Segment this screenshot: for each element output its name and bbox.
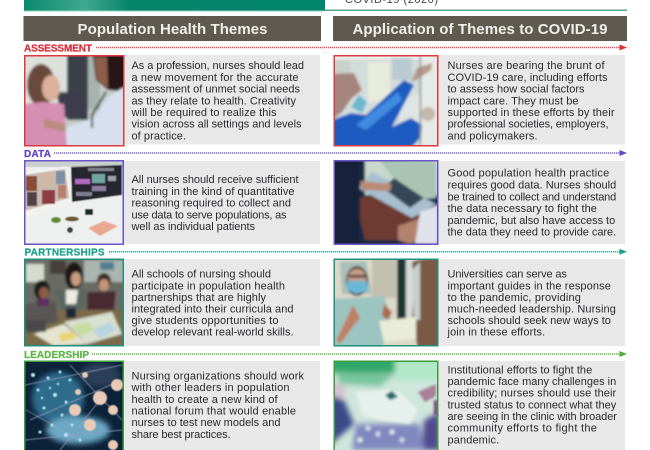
text: data applied: the data they need to provide care. — [448, 226, 616, 238]
panel: data theme — [20, 155, 320, 250]
text: partnerships theme: partnerships that are highly — [132, 292, 266, 304]
text: partnerships theme: develop relevant real-world skills. — [132, 326, 294, 338]
text: partnerships theme: give students opportunities to — [132, 315, 278, 327]
text: data applied — [448, 168, 616, 238]
text: assessment applied: impact care. They must be — [448, 96, 578, 108]
label: assessment: ASSESSMENT — [24, 44, 92, 55]
text: data theme: use data to serve populations, as — [132, 210, 287, 222]
text: data applied: the data necessary to fight the — [448, 203, 597, 215]
text: leadership theme: Nursing organizations should work — [132, 370, 304, 382]
text: leadership theme: share best practices. — [132, 429, 230, 441]
row: partnerships — [20, 248, 627, 350]
text: leadership theme — [130, 370, 304, 441]
text: assessment theme: of practice. — [132, 130, 186, 142]
panel: assessment theme — [20, 50, 320, 150]
text: leadership applied — [448, 364, 617, 446]
text: leadership theme: national forum that would enable — [132, 406, 296, 418]
text: assessment applied — [448, 60, 615, 142]
panel: leadership theme — [20, 355, 320, 450]
heading: Application of Themes to COVID-19: Application of Themes to COVID-19 — [352, 21, 608, 38]
text: data applied: pandemic, but also have access to — [448, 215, 615, 227]
text: data theme: reasoning required to collect and — [132, 198, 291, 210]
text: leadership theme: health to create a new kind of — [132, 394, 278, 406]
text: leadership theme: with other leaders in population — [130, 382, 290, 394]
text: data applied: requires good data. Nurses should — [448, 180, 616, 192]
text: partnerships applied: join in these efforts. — [446, 326, 545, 338]
text: assessment theme — [130, 60, 304, 142]
text: partnerships applied — [446, 268, 616, 338]
photo: hands typing on a laptop — [330, 155, 440, 250]
text: assessment applied: Nurses are bearing the brunt of — [448, 60, 605, 72]
photo: glowing network of people — [20, 355, 130, 450]
row: data — [20, 149, 627, 250]
text: assessment theme: vision across all settings and levels — [132, 118, 302, 130]
label: partnerships: PARTNERSHIPS — [24, 248, 105, 258]
text: leadership applied: are seeing in the clinic with broader — [448, 411, 617, 423]
arrow: assessment — [96, 44, 627, 50]
text: assessment theme: a new movement for the accurate — [132, 72, 298, 84]
heading: Population Health Themes: Population Health Themes — [78, 21, 268, 38]
heading: Application of Themes to COVID-19 — [333, 16, 627, 41]
text: assessment theme: assessment of unmet social needs — [132, 84, 300, 96]
arrow: partnerships — [109, 249, 627, 255]
text: leadership theme: nurses to test new models and — [132, 417, 280, 429]
text: leadership applied: Institutional efforts to fight the — [448, 364, 592, 376]
text: leadership applied: pandemic face many challenges in — [448, 376, 616, 388]
text: data theme — [130, 174, 298, 233]
text: leadership applied: community efforts to fight the — [448, 422, 597, 434]
photo: nurse examining a girl — [20, 50, 130, 150]
text: partnerships applied: schools should seek new ways to — [448, 315, 611, 327]
text: leadership applied: trusted status to connect what they — [448, 400, 617, 412]
heading: Population Health Themes — [24, 16, 321, 41]
panel: leadership applied to COVID-19 — [330, 355, 625, 450]
text: data theme: well as individual patients — [130, 221, 256, 233]
text: data theme: training in the kind of quantitative — [132, 186, 294, 198]
text: assessment applied: supported in these efforts by their — [448, 107, 615, 119]
text: assessment applied: to assess how social factors — [448, 84, 585, 96]
text: partnerships applied: to the pandemic, providing — [448, 292, 581, 304]
text: assessment theme: as they relate to health. Creativity — [132, 96, 296, 108]
text: partnerships applied: Universities can serve as — [448, 268, 567, 280]
panel: assessment applied to COVID-19 — [330, 50, 625, 150]
label: data: DATA — [24, 149, 51, 160]
text: partnerships theme: participate in population health — [132, 280, 285, 292]
row: assessment — [20, 44, 627, 150]
text: partnerships applied: important guides in the response — [448, 280, 611, 292]
text: assessment applied: COVID-19 care, including efforts — [448, 72, 608, 84]
label: leadership: LEADERSHIP — [24, 350, 89, 361]
panel: partnerships applied to COVID-19 — [330, 255, 625, 350]
photo: masked woman speaking — [330, 255, 440, 350]
text: assessment applied: professional societies, employers, — [448, 118, 608, 130]
row: leadership — [20, 350, 627, 450]
panel: partnerships theme — [20, 255, 320, 350]
text: partnerships theme — [132, 268, 294, 338]
arrow: data — [54, 150, 627, 156]
text: partnerships theme: integrated into their curricula and — [132, 304, 294, 316]
photo: handshake with green and purple overlay — [330, 355, 440, 450]
text: partnerships theme: All schools of nursing should — [132, 268, 271, 280]
arrow: leadership — [92, 351, 627, 357]
panel: data applied to COVID-19 — [330, 155, 625, 250]
text: data applied: be trained to collect and understand — [448, 192, 616, 204]
text: leadership applied: pandemic. — [448, 434, 499, 446]
text: assessment theme: As a profession, nurses should lead — [132, 60, 304, 72]
text: data applied: Good population health practice — [448, 168, 609, 180]
text: assessment applied: and policymakers. — [448, 130, 538, 142]
top banner — [24, 0, 627, 12]
photo: nurse in blue gown adjusting IV — [330, 50, 440, 150]
photo: monitors with video call and dashboards — [20, 155, 130, 250]
photo: students collaborating around a table — [20, 255, 130, 350]
text: assessment theme: will be required to realize this — [130, 107, 277, 119]
text: data theme: All nurses should receive sufficient — [132, 174, 298, 186]
text: leadership applied: credibility; nurses should use their — [448, 388, 617, 400]
text: partnerships applied: much-needed leadership. Nursing — [448, 304, 616, 316]
